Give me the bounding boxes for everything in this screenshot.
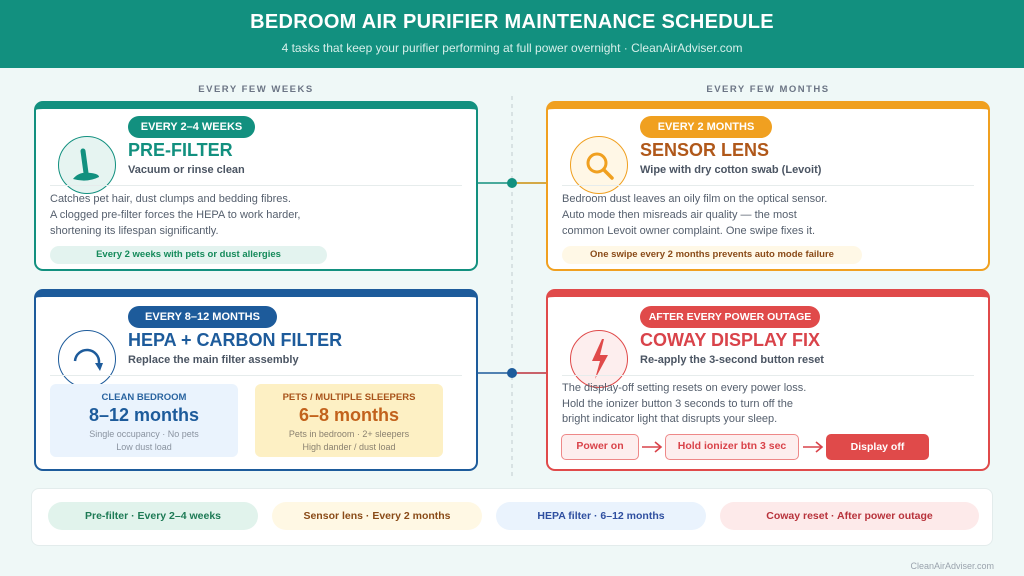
panel: HEPA + carbon filter [34,289,478,471]
text block: common Levoit owner complaint. One swipe fixes it. [562,225,815,237]
subheading: Vacuum or rinse clean [128,164,245,176]
icon: gauge [58,330,116,388]
text block [50,193,300,237]
header [0,0,1024,68]
footer credit: CleanAirAdviser.com [910,561,994,571]
box: clean bedroom: CLEAN BEDROOM [102,392,186,403]
text block: bright indicator light that disrupts your sleep. [562,413,777,425]
badge: EVERY 8–12 MONTHS [145,311,260,323]
text block: Bedroom dust leaves an oily film on the optical sensor. [562,193,827,205]
badge [128,116,255,138]
heading: HEPA + CARBON FILTER [128,330,342,350]
box: pets: 6–8 months [299,405,399,425]
text block: The display-off setting resets on every power loss. [562,382,806,394]
icon: brush [58,136,116,194]
badge: EVERY 2–4 WEEKS [141,121,242,133]
panel: sensor lens [546,101,990,271]
badge: EVERY 2 MONTHS [658,121,754,133]
subheading: Replace the main filter assembly [128,354,299,366]
box: pets: PETS / MULTIPLE SLEEPERS [283,392,415,403]
box: clean bedroom: Single occupancy · No pets [89,429,199,439]
pill: sensor lens [272,502,482,530]
subheading: Wipe with dry cotton swab (Levoit) [640,164,821,176]
pill: coway [720,502,979,530]
pill: sensor lens: Sensor lens · Every 2 months [303,510,451,522]
subheading: Re-apply the 3-second button reset [640,354,824,366]
pill: coway: Coway reset · After power outage [766,510,933,522]
heading: PRE-FILTER [128,140,233,160]
text block: Hold the ionizer button 3 seconds to turn off the [562,398,793,410]
box: clean bedroom: 8–12 months [89,405,199,425]
heading: SENSOR LENS [640,140,769,160]
badge [640,116,772,138]
icon: lightning [570,330,628,388]
step: display off: Display off [851,441,904,453]
step: hold ionizer [665,434,799,460]
pill: hepa [496,502,706,530]
badge [640,306,820,328]
note [562,246,862,264]
box: clean bedroom [50,384,238,457]
pill: pre-filter: Pre-filter · Every 2–4 weeks [85,510,221,522]
box: pets: Pets in bedroom · 2+ sleepers [289,429,409,439]
subtitle: 4 tasks that keep your purifier performing at full power overnight · CleanAirAdviser.com [282,41,742,55]
box: clean bedroom: Low dust load [116,442,172,452]
text block: Auto mode then misreads air quality — the most [562,209,797,221]
text block: A clogged pre-filter forces the HEPA to work harder, [50,209,300,221]
note: Every 2 weeks with pets or dust allergies [96,249,281,260]
panel: coway display fix [546,289,990,471]
title: BEDROOM AIR PURIFIER MAINTENANCE SCHEDULE [250,11,774,33]
icon: magnifier [570,136,628,194]
note [50,246,327,264]
step: display off [826,434,929,460]
badge [128,306,277,328]
section label: every few months: EVERY FEW MONTHS [706,84,830,95]
text block [562,193,827,237]
step: power on [561,434,639,460]
arrow [642,441,662,452]
section label: every few weeks: EVERY FEW WEEKS [198,84,314,95]
arrow [803,441,824,452]
text block [562,382,806,425]
panel: pre-filter [34,101,478,271]
box: pets: High dander / dust load [302,442,396,452]
badge: AFTER EVERY POWER OUTAGE [649,311,811,323]
step: power on: Power on [576,440,624,452]
note: One swipe every 2 months prevents auto mode failure [590,249,834,260]
heading: COWAY DISPLAY FIX [640,330,820,350]
pill: pre-filter [48,502,258,530]
text block: shortening its lifespan significantly. [50,225,219,237]
box: pets [255,384,443,457]
pill: hepa: HEPA filter · 6–12 months [537,510,665,522]
step: hold ionizer: Hold ionizer btn 3 sec [678,440,786,452]
summary legend [31,488,993,546]
text block: Catches pet hair, dust clumps and bedding fibres. [50,193,291,205]
